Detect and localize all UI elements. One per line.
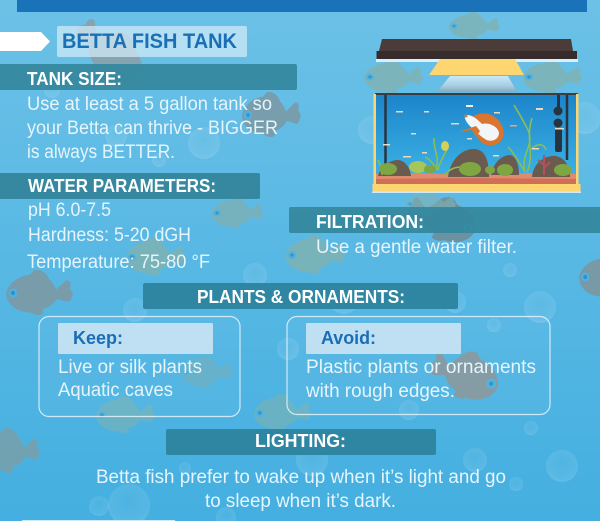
substrate highlight — [376, 173, 577, 179]
heading: plants and ornaments — [143, 283, 458, 309]
panel: tank size: TANK SIZE: — [27, 69, 122, 89]
panel: keep: Live or silk plants — [58, 357, 202, 378]
water — [375, 94, 578, 184]
panel: tank size: your Betta can thrive - BIGGER — [27, 118, 278, 139]
panel: avoid — [287, 316, 550, 414]
plants — [378, 105, 546, 176]
title: BETTA FISH TANK — [62, 30, 237, 53]
rocks — [378, 149, 570, 177]
panel: filtration: FILTRATION: — [316, 212, 424, 232]
panel: avoid: Plastic plants or ornaments — [306, 357, 536, 378]
panel: tank size: is always BETTER. — [27, 142, 175, 163]
panel: lighting: LIGHTING: — [255, 431, 346, 451]
panel: lighting: to sleep when it’s dark. — [205, 491, 396, 512]
substrate — [376, 173, 577, 184]
illustration: aquarium — [372, 39, 581, 193]
bushes — [379, 141, 572, 176]
tank frame and base — [372, 94, 580, 192]
panel: water parameters: WATER PARAMETERS: — [28, 176, 216, 196]
lamp — [429, 59, 524, 75]
light beam — [437, 76, 517, 92]
bottom edge strip — [22, 520, 175, 521]
panel: avoid: with rough edges. — [305, 381, 455, 402]
red plant — [538, 155, 550, 175]
panel: water parameters: pH 6.0-7.5 — [28, 200, 111, 221]
tank rods — [386, 95, 567, 165]
panel: lighting: Betta fish prefer to wake up when it’s light and go — [96, 467, 506, 488]
hood — [379, 39, 573, 51]
panel: keep: Aquatic caves — [58, 380, 173, 401]
panel: tank size — [0, 64, 297, 163]
panel: filtration: Use a gentle water filter. — [316, 237, 517, 258]
betta fish — [458, 114, 503, 145]
panel: avoid: Avoid: — [321, 328, 376, 348]
panel: water parameters — [0, 173, 260, 273]
filter — [554, 95, 562, 152]
bubbles — [44, 82, 600, 521]
arrow tab — [0, 32, 50, 51]
panel: water parameters: Hardness: 5-20 dGH — [28, 225, 191, 246]
heading: plants and ornaments: PLANTS & ORNAMENTS: — [197, 287, 405, 307]
panel: keep: Keep: — [73, 328, 123, 348]
panel: tank size: Use at least a 5 gallon tank so — [27, 94, 272, 115]
panel: keep — [39, 316, 240, 416]
panel: water parameters: Temperature: 75-80 °F — [27, 252, 210, 273]
small fish — [383, 105, 564, 158]
tank rim — [375, 93, 578, 95]
header bar — [17, 0, 587, 12]
panel: filtration — [289, 207, 600, 258]
panel: lighting — [96, 429, 506, 512]
